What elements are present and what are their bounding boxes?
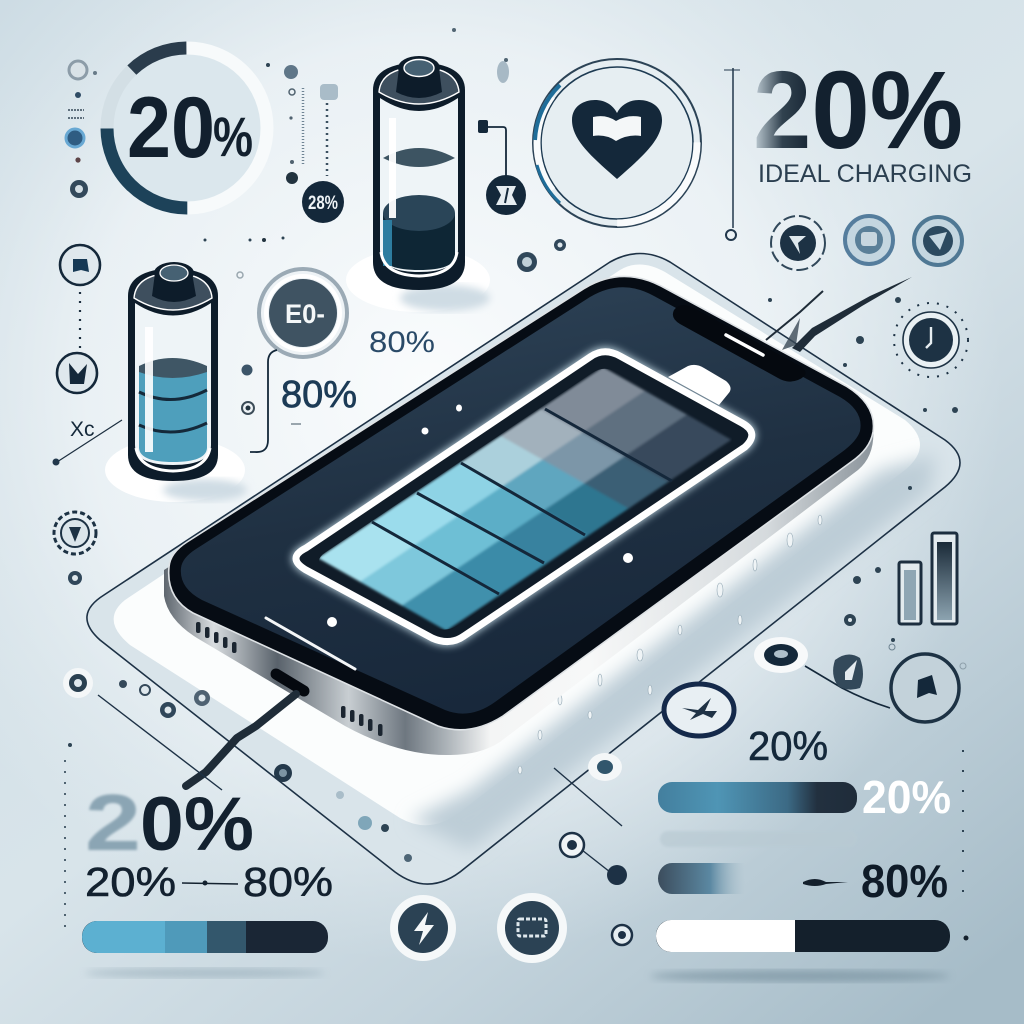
clock icon (894, 303, 968, 377)
connector badge (478, 120, 526, 215)
heart icon ring (533, 59, 701, 227)
left column icons (66, 61, 97, 198)
water droplets (518, 515, 822, 774)
center battery dome (379, 67, 459, 104)
lower left node icons (63, 668, 222, 790)
label 20%: 20% (748, 723, 828, 769)
mini bar chart (899, 533, 957, 624)
bottom shadows (85, 968, 950, 982)
faint bar (660, 831, 857, 847)
center battery (346, 56, 490, 312)
right divider line (724, 68, 740, 240)
home line (266, 618, 355, 669)
connector line (805, 666, 890, 708)
book (593, 116, 641, 141)
platform under phone (87, 254, 960, 884)
progress bar two (658, 863, 745, 894)
large ring (891, 654, 959, 722)
center battery fill (383, 213, 455, 270)
label 80% thin: 80% (369, 326, 435, 359)
dotted right line (963, 750, 968, 940)
gauge value: 20 (127, 80, 215, 176)
small scattered marks (68, 63, 958, 747)
bottom left big 20%: 0% (140, 782, 254, 867)
chip icon (497, 893, 567, 963)
small 28% badge: 28% (308, 193, 338, 214)
notch (673, 305, 806, 382)
bottom left big 20%: 2 (85, 778, 141, 867)
heart (572, 100, 662, 179)
E0 dial (259, 269, 347, 357)
phone body (164, 280, 873, 755)
ring gauge 20%: % (213, 105, 253, 168)
pointer line and mark (52, 418, 122, 466)
gear icon (54, 512, 96, 585)
speaker slit (726, 335, 763, 355)
dial leader line (250, 350, 277, 452)
left ring icon top (60, 245, 100, 285)
small dial dots (237, 28, 566, 425)
charging cable (186, 694, 296, 786)
icon row (771, 216, 962, 270)
white lens icon (754, 637, 808, 673)
heading 20%: 20% (753, 49, 963, 172)
range labels: 20% (85, 859, 176, 905)
heading ideal charging: IDEAL CHARGING (758, 160, 972, 188)
charging port (276, 674, 304, 691)
range bar (82, 921, 328, 953)
phone rim (169, 276, 873, 730)
battery terminal (668, 365, 731, 405)
shield icon (833, 654, 863, 690)
progress bar one (658, 782, 857, 813)
right bottom icons (754, 637, 966, 722)
phone screen (181, 287, 861, 714)
white 20%: 20% (862, 771, 951, 823)
screen dots (327, 404, 633, 627)
left battery dome (134, 273, 212, 310)
ring gauge 20% (107, 48, 267, 208)
battery outline on screen (296, 352, 752, 642)
left battery fill (139, 366, 207, 462)
left battery (105, 262, 247, 502)
small 28% badge (302, 181, 344, 223)
range labels: 80% (243, 859, 333, 905)
lightning icon (390, 895, 456, 961)
plane icon (664, 684, 734, 736)
battery glow (296, 352, 752, 642)
range labels (85, 859, 333, 905)
label 80%: 80% (281, 374, 357, 416)
left ring icon bottom (57, 353, 97, 393)
E0 dial: E0- (285, 299, 325, 329)
dotted connector (79, 292, 81, 350)
battery cells (318, 367, 731, 631)
speaker holes right (341, 706, 382, 736)
bottom left big 20% (85, 778, 254, 867)
top cables (766, 277, 912, 352)
lower center node icons (274, 753, 632, 945)
speaker holes left (196, 622, 236, 653)
dotted gauge lines (284, 65, 338, 184)
label 80% right: 80% (861, 855, 948, 907)
pointer line and mark: Xc (70, 418, 95, 441)
dash marker (803, 879, 848, 886)
phone (164, 276, 873, 755)
dotted left bottom line (64, 760, 66, 930)
progress bar three (656, 920, 950, 952)
